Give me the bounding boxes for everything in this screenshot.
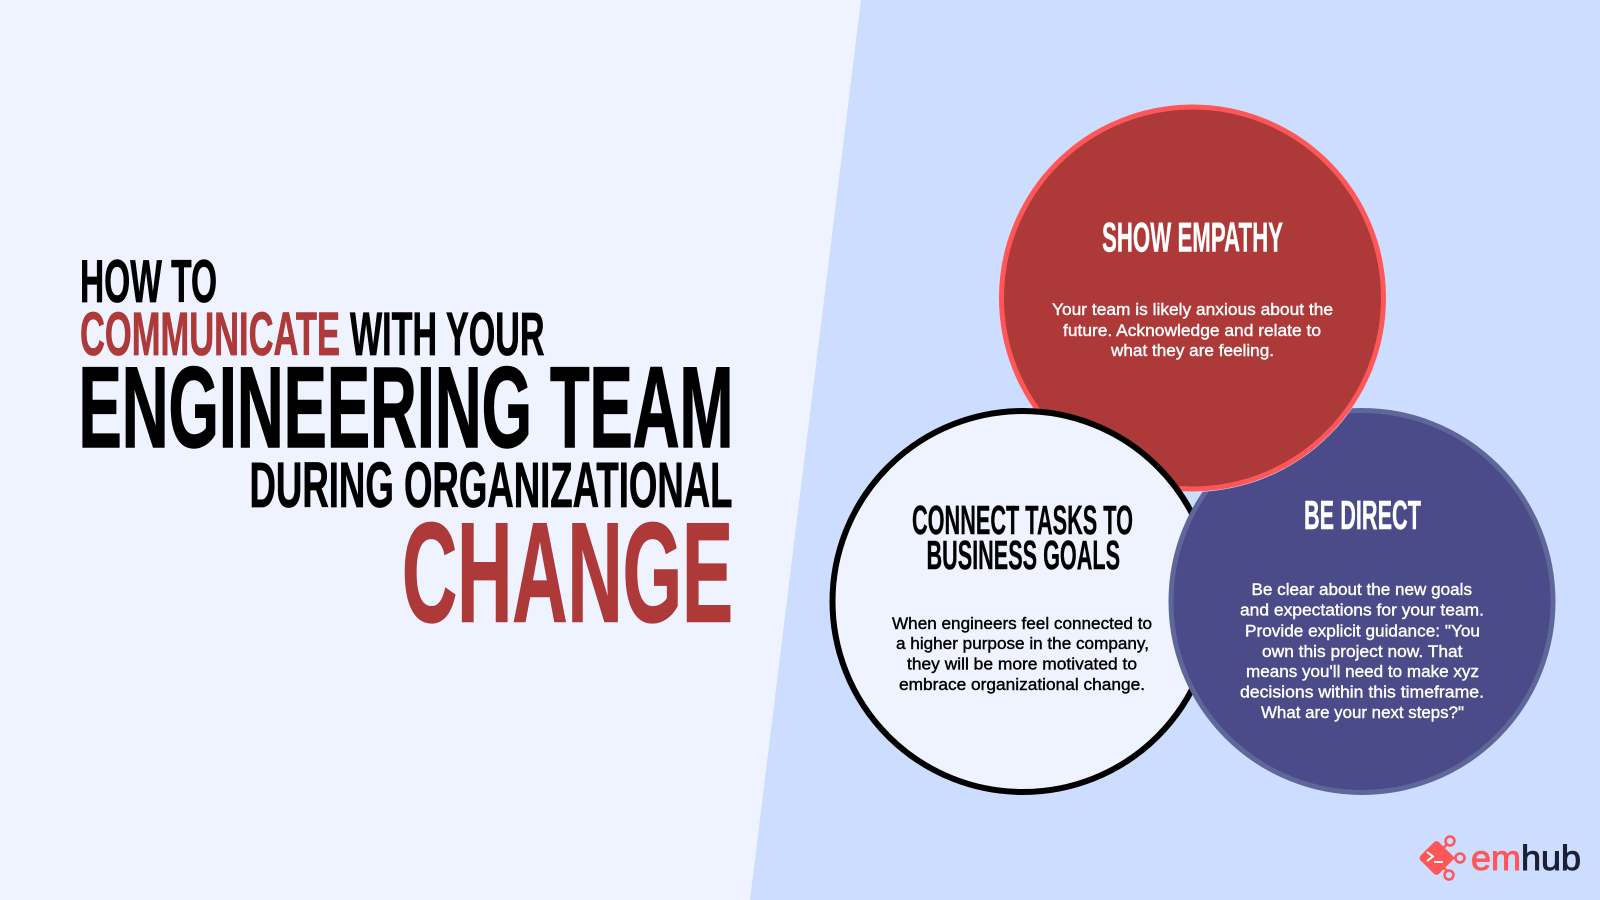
title line: engineering team: ENGINEERING TEAM — [78, 344, 734, 472]
body: connect tasks: they will be more motivated to — [907, 654, 1137, 674]
heading: show empathy: SHOW EMPATHY — [1102, 214, 1283, 260]
panel text: connect tasks — [892, 497, 1152, 694]
title line: communicate with your: WITH YOUR — [350, 300, 544, 368]
title — [78, 248, 734, 652]
heading: connect tasks to business goals: CONNECT TASKS TO — [912, 497, 1133, 543]
body: show empathy: what they are feeling. — [1110, 341, 1274, 360]
circle: connect tasks to business goals — [832, 411, 1214, 792]
heading: be direct: BE DIRECT — [1304, 492, 1421, 538]
body: be direct: What are your next steps?" — [1261, 703, 1464, 722]
body: show empathy — [1052, 300, 1333, 360]
body: be direct: Provide explicit guidance: "You — [1245, 622, 1480, 640]
body: connect tasks — [892, 614, 1152, 694]
background: right slanted panel — [750, 0, 1600, 900]
logo: emhub — [1418, 836, 1581, 880]
title line: how to: HOW TO — [80, 248, 217, 315]
circle: be direct — [1171, 410, 1553, 792]
wordmark: emhub: emhub — [1471, 839, 1581, 878]
title line: communicate with your: COMMUNICATE — [80, 300, 340, 368]
body: connect tasks: a higher purpose in the company, — [896, 634, 1149, 653]
title line: during organizational: DURING ORGANIZATIONAL — [250, 449, 732, 521]
body: be direct — [1240, 580, 1484, 722]
body: be direct: decisions within this timeframe. — [1240, 682, 1484, 702]
body: be direct: and expectations for your team. — [1240, 600, 1484, 620]
body: be direct: own this project now. That — [1262, 642, 1463, 661]
title line: change: CHANGE — [402, 494, 733, 652]
body: show empathy: Your team is likely anxious about the — [1052, 300, 1333, 319]
icon: emhub diamond with nodes — [1418, 836, 1464, 880]
panel text: show empathy — [1052, 214, 1333, 360]
panel text: be direct — [1240, 492, 1484, 722]
body: connect tasks: embrace organizational change. — [899, 675, 1145, 694]
body: be direct: Be clear about the new goals — [1252, 580, 1472, 599]
heading: connect tasks to business goals — [912, 497, 1133, 578]
heading: connect tasks to business goals: BUSINESS GOALS — [926, 532, 1120, 578]
body: connect tasks: When engineers feel connected to — [892, 614, 1152, 633]
body: be direct: means you'll need to make xyz — [1246, 662, 1479, 681]
circle: show empathy — [1002, 107, 1384, 489]
body: show empathy: future. Acknowledge and relate to — [1063, 321, 1321, 340]
